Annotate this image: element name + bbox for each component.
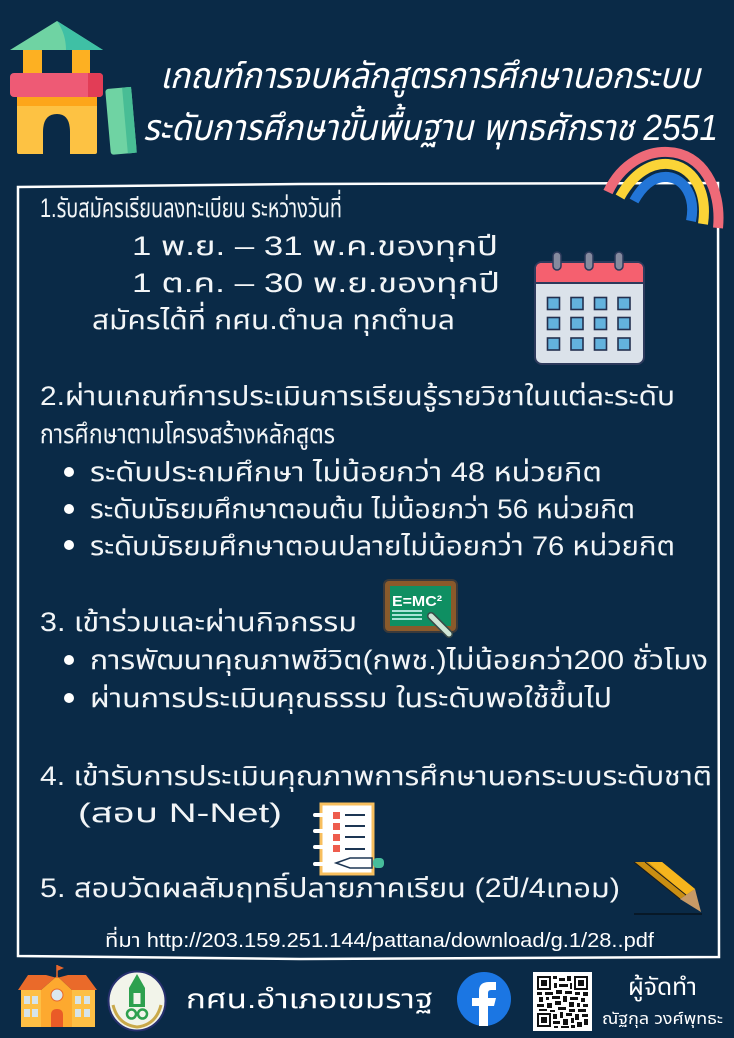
icon: chalkboard E=MC2: E=MC² [392, 593, 442, 610]
section 1: 1.รับสมัครเรียนลงทะเบียน ระหว่างวันที่ [40, 189, 342, 223]
footer office name: กศน.อำเภอเขมราฐ [186, 984, 433, 1014]
section 1 [40, 189, 500, 336]
section 3: 3. เข้าร่วมและผ่านกิจกรรม [40, 607, 357, 637]
section 4: (สอบ N-Net) [78, 798, 282, 828]
icon: facebook [457, 972, 511, 1026]
icon: rainbow [608, 152, 719, 228]
section 2: ระดับมัธยมศึกษาตอนต้น ไม่น้อยกว่า 56 หน่วยกิต [90, 494, 635, 524]
section 2: 2.ผ่านเกณฑ์การประเมินการเรียนรู้รายวิชาในแต่ละระดับ [40, 381, 675, 412]
icon: calendar [535, 252, 644, 364]
section 2 [40, 381, 675, 561]
icon: agency seal [108, 972, 166, 1030]
section 5: 5. สอบวัดผลสัมฤทธิ์ปลายภาคเรียน (2ปี/4เทอม) [40, 873, 620, 903]
icon: chalkboard E=MC2 [384, 580, 457, 634]
section 3: การพัฒนาคุณภาพชีวิต(กพช.)ไม่น้อยกว่า200 ชั่วโมง [90, 643, 708, 676]
section 2: ระดับประถมศึกษา ไม่น้อยกว่า 48 หน่วยกิต [90, 457, 602, 487]
source line: ที่มา http://203.159.251.144/pattana/download/g.1/28..pdf [105, 926, 654, 952]
panel: chalk frame [18, 183, 719, 959]
section 2: การศึกษาตามโครงสร้างหลักสูตร [40, 419, 335, 450]
section 2: ระดับมัธยมศึกษาตอนปลายไม่น้อยกว่า 76 หน่วยกิต [90, 531, 675, 561]
qr code [533, 972, 592, 1031]
credit: ผู้จัดทำ [628, 974, 697, 1002]
section 4 [40, 761, 712, 828]
icon: school [18, 965, 97, 1027]
section 1: สมัครได้ที่ กศน.ตำบล ทุกตำบล [92, 301, 455, 336]
section 1: 1 ต.ค. – 30 พ.ย.ของทุกปี [132, 268, 500, 299]
title: เกณฑ์การจบหลักสูตรการศึกษานอกระบบ [160, 55, 702, 98]
title [143, 55, 718, 150]
section 1: 1 พ.ย. – 31 พ.ค.ของทุกปี [132, 231, 498, 262]
section 4: 4. เข้ารับการประเมินคุณภาพการศึกษานอกระบบระดับชาติ [40, 761, 712, 792]
icon: toy block tower [10, 21, 137, 155]
icon: pencil [634, 862, 702, 914]
credit: ณัฐกุล วงศ์พุทธะ [602, 1011, 723, 1028]
credit [602, 974, 723, 1028]
section 3 [40, 607, 708, 714]
section 3: ผ่านการประเมินคุณธรรม ในระดับพอใช้ขึ้นไป [90, 679, 612, 714]
icon: notebook and pen [315, 804, 384, 874]
